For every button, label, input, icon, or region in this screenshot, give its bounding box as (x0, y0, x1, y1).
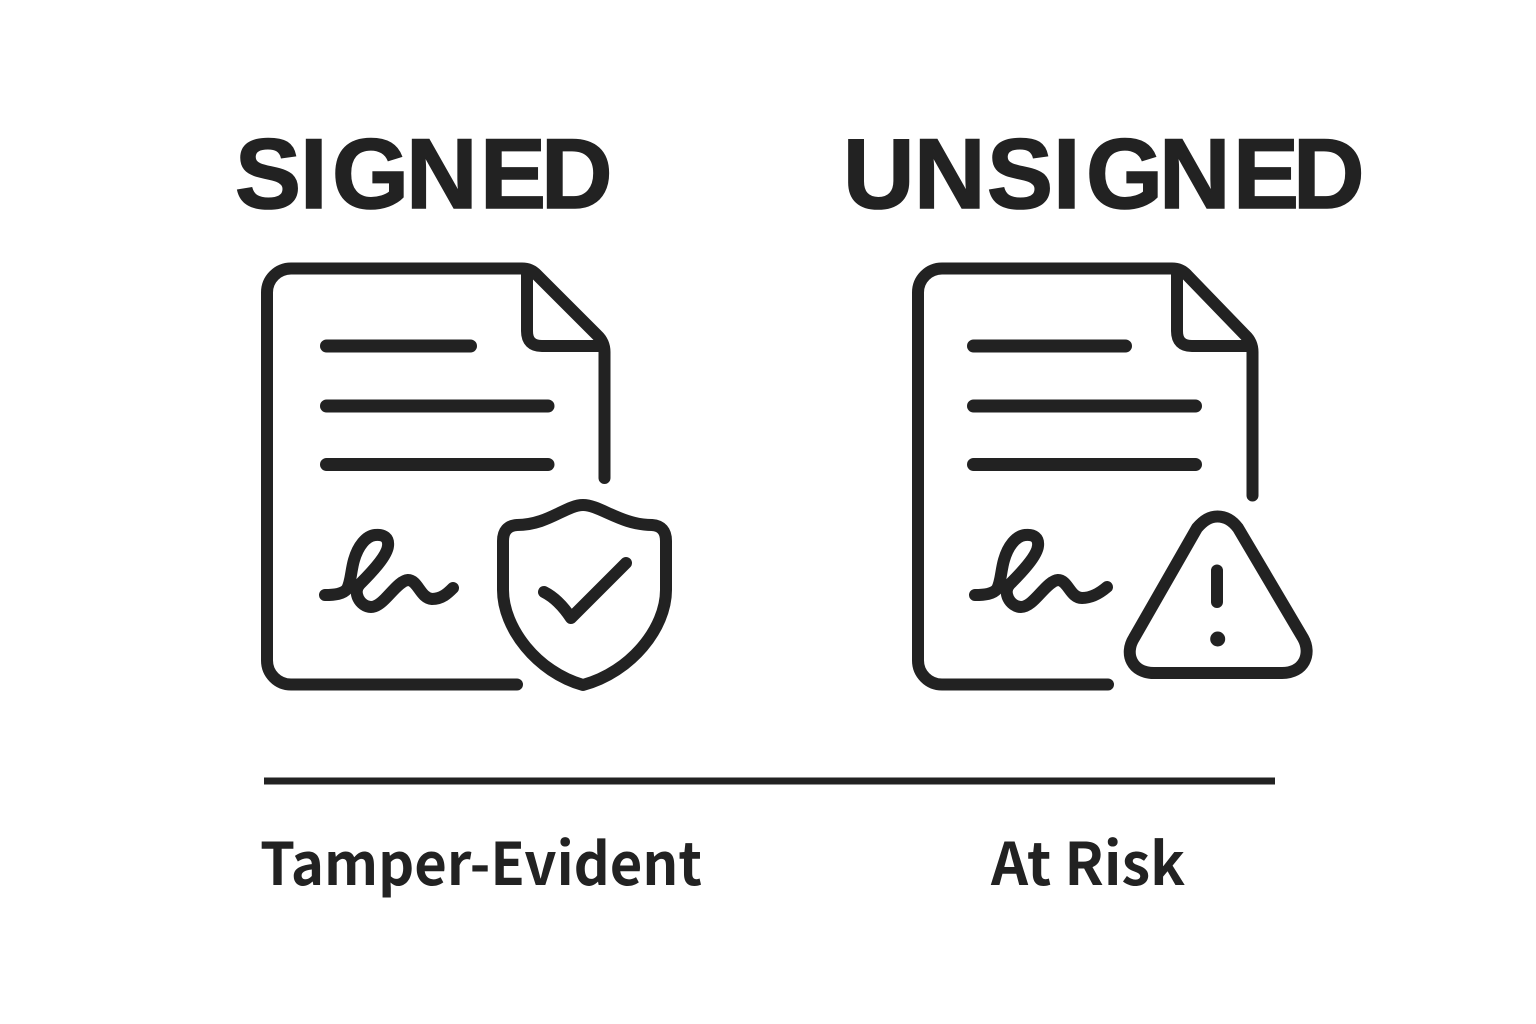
label: At Risk: At Risk (990, 817, 1185, 902)
icon: unsigned document (918, 268, 1252, 684)
icon: warning triangle (1130, 516, 1307, 673)
icon: shield with check (503, 505, 666, 685)
icon: signed document (267, 268, 604, 684)
label: Tamper-Evident: Tamper-Evident (260, 817, 702, 902)
divider line (264, 778, 1275, 784)
heading: UNSIGNED: UNSIGNED (843, 118, 1364, 229)
heading: SIGNED: SIGNED (235, 118, 612, 229)
